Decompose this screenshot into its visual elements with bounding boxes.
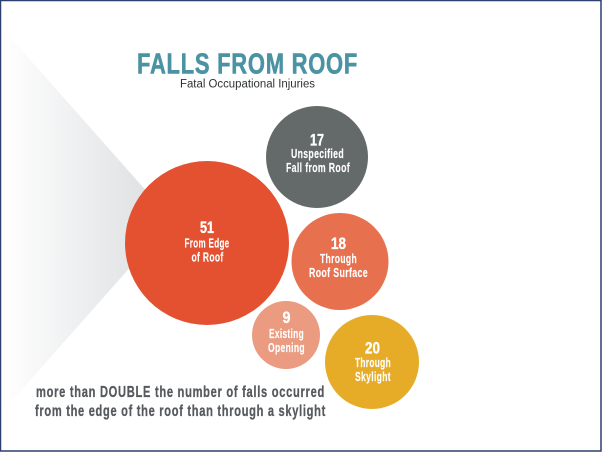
bubble: 17 unspecified fall from roof: 17: [310, 132, 324, 150]
bubble: 20 through skylight: Skylight: [355, 370, 391, 384]
bubble: 51 from edge of roof: of Roof: [192, 250, 224, 264]
bubble: 18 through roof surface: [292, 213, 388, 310]
bubble: 20 through skylight: 20: [365, 340, 380, 358]
bubble: 9 existing opening: Opening: [268, 341, 305, 355]
subtitle: Fatal Occupational Injuries: [180, 78, 315, 90]
callout text: more than DOUBLE the number of falls occurred: [36, 384, 325, 401]
bubble: 51 from edge of roof: [125, 161, 289, 325]
title: FALLS FROM ROOF: [137, 48, 358, 80]
bubble: 51 from edge of roof: 51: [200, 219, 214, 237]
bubble: 20 through skylight: [325, 315, 419, 409]
callout text: [35, 384, 326, 420]
bubble: 18 through roof surface: Through: [320, 252, 357, 266]
bubble: 9 existing opening: [252, 301, 320, 369]
bubble: 17 unspecified fall from roof: Fall from Roof: [286, 161, 350, 175]
bubble: 9 existing opening: Existing: [269, 327, 304, 341]
bubble: 9 existing opening: 9: [282, 309, 290, 327]
bubble: 18 through roof surface: 18: [331, 235, 346, 253]
bubble: 51 from edge of roof: From Edge: [184, 236, 230, 250]
bubble: 18 through roof surface: Roof Surface: [309, 266, 368, 280]
callout text: from the edge of the roof than through a skylight: [35, 403, 326, 420]
bubble: 20 through skylight: Through: [355, 356, 391, 370]
bubble: 17 unspecified fall from roof: [266, 106, 368, 208]
grey gradient triangle: [2, 28, 172, 412]
bubble: 17 unspecified fall from roof: Unspecified: [291, 147, 344, 161]
